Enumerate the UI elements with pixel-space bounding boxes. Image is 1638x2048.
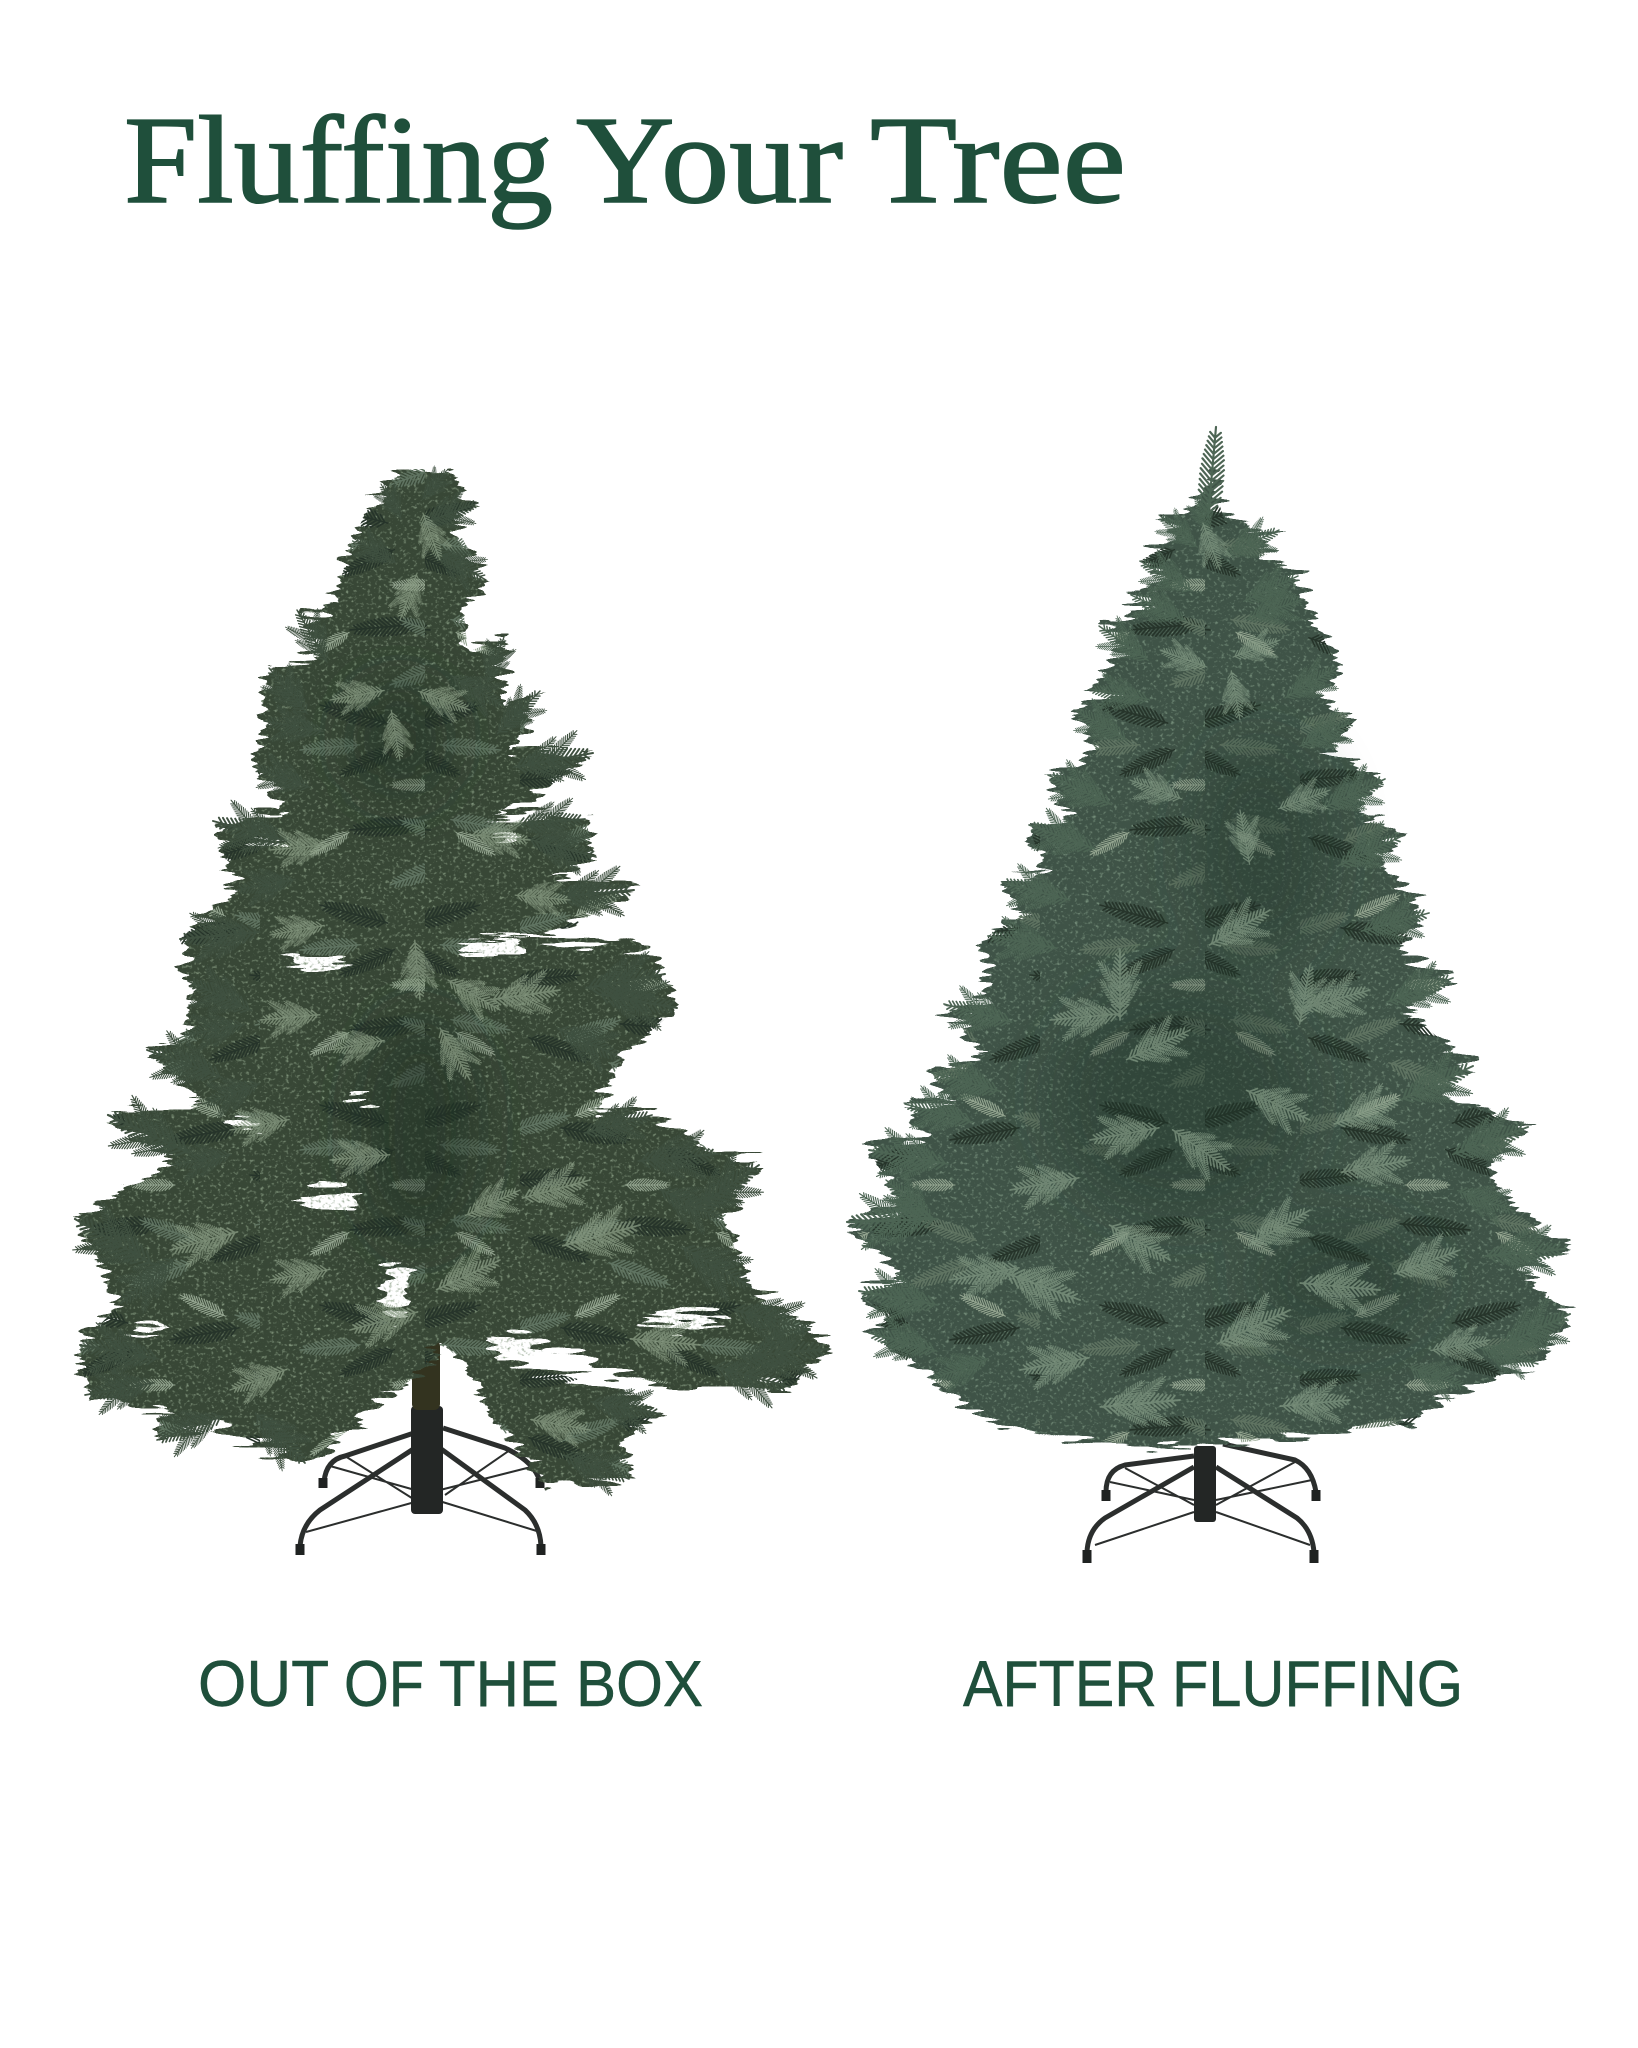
shading: left tree core xyxy=(350,680,480,1250)
frond texture: left tree xyxy=(75,469,828,1486)
edge branches: left tree xyxy=(58,460,831,1503)
title: Tree xyxy=(870,92,1126,230)
edge branches: right tree xyxy=(846,426,1582,1408)
panel: after fluffing tree xyxy=(846,426,1582,1563)
stand sleeve: left tree xyxy=(411,1406,443,1514)
foliage mass: left tree xyxy=(75,469,828,1486)
frond texture: right tree xyxy=(847,470,1570,1448)
title: Your xyxy=(576,92,843,230)
label: out of the box: THE xyxy=(439,1647,559,1720)
stand: right tree xyxy=(1087,1444,1316,1563)
panel: out of the box tree xyxy=(58,460,831,1555)
foliage: right tree xyxy=(846,426,1582,1448)
label: out of the box: BOX xyxy=(576,1647,703,1720)
stand: left tree xyxy=(300,1428,541,1555)
white gaps between branches xyxy=(124,834,722,1353)
stand sleeve: right tree xyxy=(1194,1446,1216,1522)
shading: right tree core xyxy=(1050,740,1430,1340)
foliage: left tree xyxy=(58,460,831,1503)
label: out of the box: OF xyxy=(344,1647,424,1720)
trunk: left tree xyxy=(412,1340,440,1410)
label: out of the box: OUT xyxy=(198,1647,328,1720)
highlight fronds: left tree xyxy=(163,507,702,1452)
label: after fluffing: FLUFFING xyxy=(1172,1647,1463,1720)
highlight fronds: right tree xyxy=(946,517,1494,1436)
label: after fluffing: AFTER xyxy=(963,1647,1157,1720)
foliage mass: right tree xyxy=(847,470,1570,1448)
title: Fluffing xyxy=(124,92,553,230)
